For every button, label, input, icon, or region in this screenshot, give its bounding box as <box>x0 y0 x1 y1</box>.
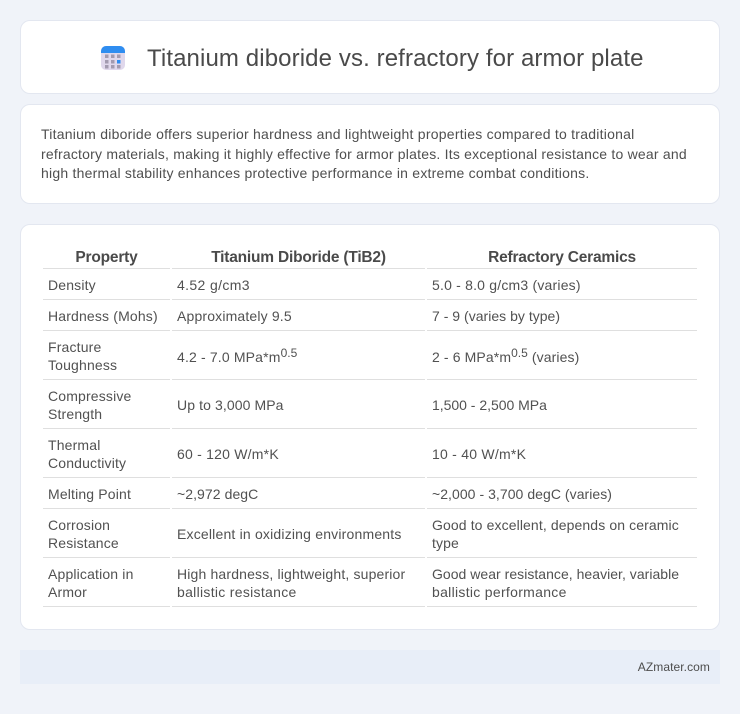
row: compressive strength: Strength <box>48 406 102 422</box>
panel: summary <box>20 104 720 204</box>
table header: refractory ceramics: Refractory Ceramics <box>488 249 636 266</box>
row: fracture toughness: 2 - 6 MPa*m0.5 (varies) <box>432 346 579 365</box>
row: density <box>48 277 581 293</box>
panel: comparison table <box>20 224 720 630</box>
row: fracture toughness: Fracture <box>48 339 101 355</box>
row: fracture toughness <box>48 339 579 373</box>
row: hardness: Approximately 9.5 <box>177 308 292 324</box>
row: compressive strength: Compressive <box>48 388 131 404</box>
footer bar <box>20 650 720 684</box>
row: corrosion resistance: Resistance <box>48 535 119 551</box>
summary text: high thermal stability enhances protective performance in extreme combat conditions. <box>41 165 589 181</box>
row: hardness: Hardness (Mohs) <box>48 308 158 324</box>
table header: property: Property <box>75 249 138 266</box>
row: compressive strength <box>48 388 547 422</box>
row: application in armor: Good wear resistance, heavier, variable <box>432 566 679 582</box>
row: fracture toughness: 4.2 - 7.0 MPa*m0.5 <box>177 346 297 365</box>
title: Titanium diboride vs. refractory for armor plate <box>147 45 644 72</box>
row: fracture toughness: Toughness <box>48 357 117 373</box>
row: thermal conductivity: Conductivity <box>48 455 126 471</box>
row: corrosion resistance: Good to excellent, depends on ceramic <box>432 517 679 533</box>
row: thermal conductivity: 10 - 40 W/m*K <box>432 446 526 462</box>
summary text: refractory materials, making it highly effective for armor plates. Its exceptional resistance to wear and <box>41 146 687 162</box>
row: application in armor: Application in <box>48 566 134 582</box>
summary text: Titanium diboride offers superior hardness and lightweight properties compared to traditional <box>41 126 635 142</box>
row: application in armor: ballistic performance <box>432 584 567 600</box>
table header: titanium diboride: Titanium Diboride (TiB2) <box>211 249 386 266</box>
row: melting point <box>48 486 612 502</box>
row: corrosion resistance: type <box>432 535 459 551</box>
row: hardness <box>48 308 560 324</box>
row: thermal conductivity: 60 - 120 W/m*K <box>177 446 279 462</box>
row: density: 4.52 g/cm3 <box>177 277 250 293</box>
row: density: Density <box>48 277 96 293</box>
row: hardness: 7 - 9 (varies by type) <box>432 308 560 324</box>
row: application in armor <box>48 566 679 600</box>
summary text <box>41 126 687 181</box>
row: application in armor: High hardness, lightweight, superior <box>177 566 405 582</box>
row: melting point: Melting Point <box>48 486 131 502</box>
row: application in armor: ballistic resistance <box>177 584 297 600</box>
row: application in armor: Armor <box>48 584 87 600</box>
icon: calendar <box>101 46 125 70</box>
row: thermal conductivity: Thermal <box>48 437 100 453</box>
row: melting point: ~2,000 - 3,700 degC (varies) <box>432 486 612 502</box>
row: compressive strength: 1,500 - 2,500 MPa <box>432 397 547 413</box>
row: melting point: ~2,972 degC <box>177 486 258 502</box>
footer credit: AZmater.com <box>638 660 710 674</box>
row: corrosion resistance: Corrosion <box>48 517 110 533</box>
row: corrosion resistance: Excellent in oxidizing environments <box>177 526 402 542</box>
panel: title card <box>20 20 720 94</box>
row: thermal conductivity <box>48 437 526 471</box>
row: density: 5.0 - 8.0 g/cm3 (varies) <box>432 277 581 293</box>
row: compressive strength: Up to 3,000 MPa <box>177 397 284 413</box>
row: corrosion resistance <box>48 517 679 551</box>
